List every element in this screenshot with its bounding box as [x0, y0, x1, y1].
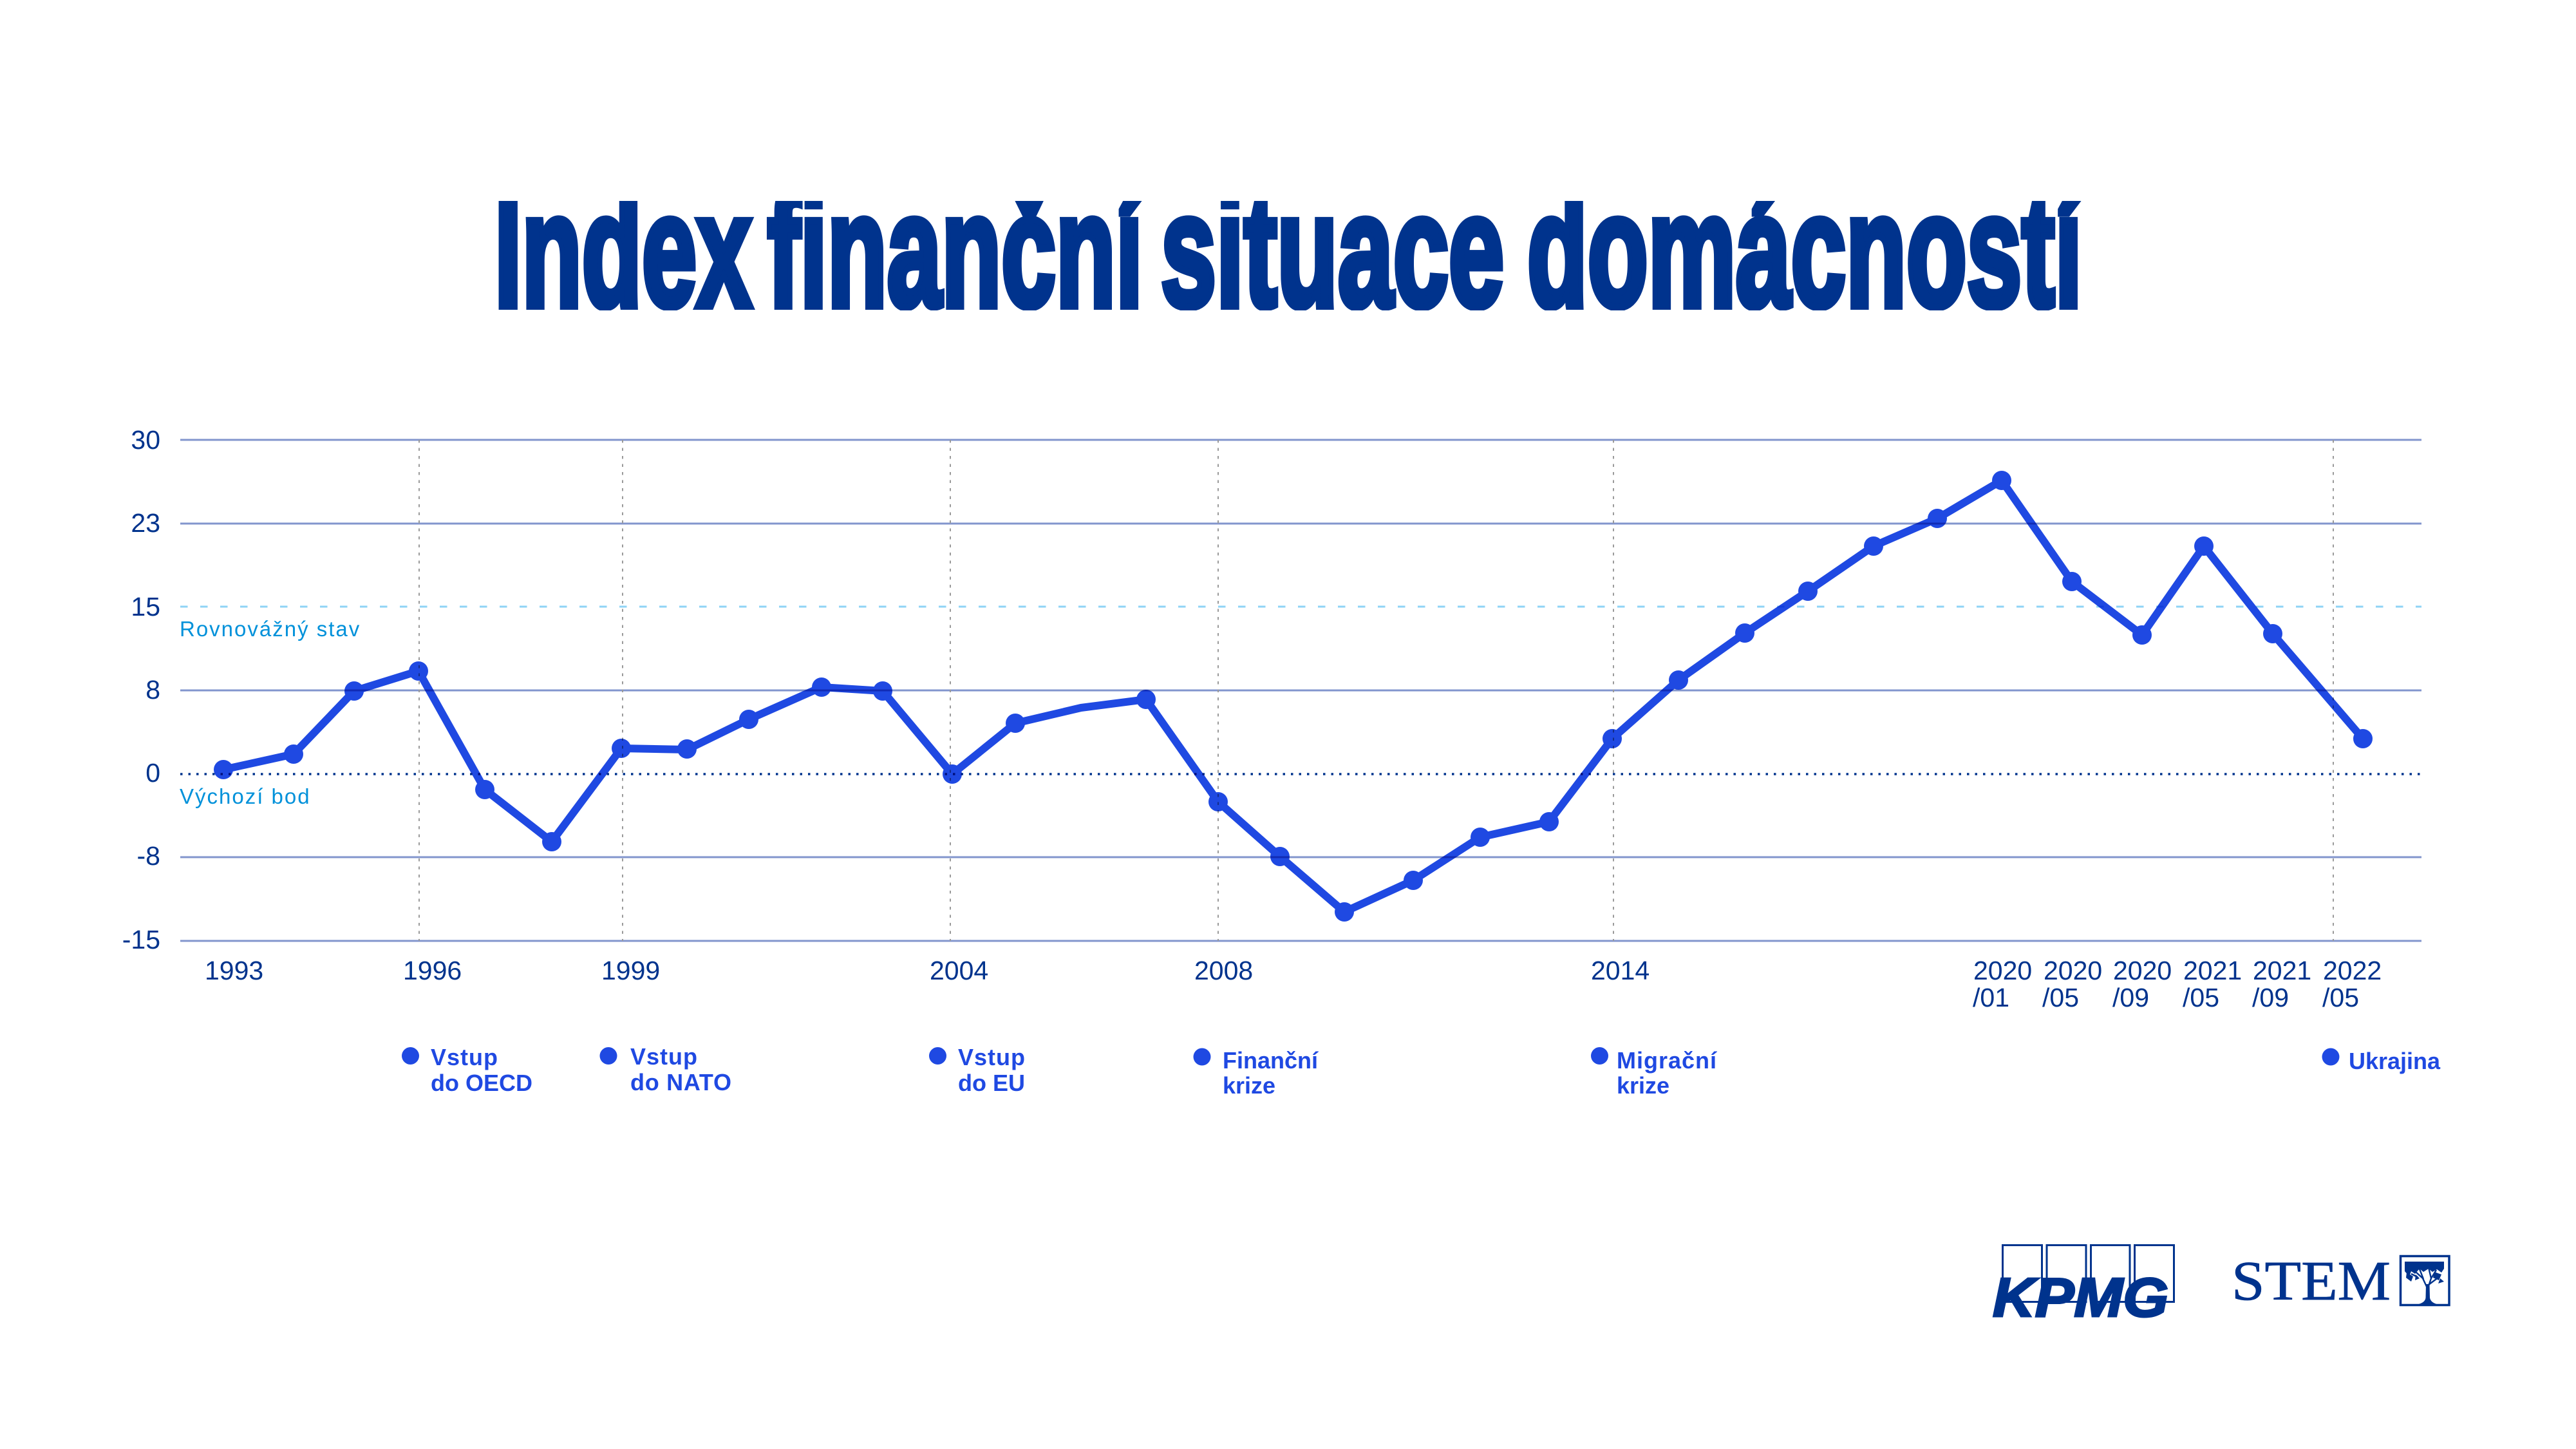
y axis labels: -15 — [122, 925, 160, 954]
title: finanční — [767, 160, 1146, 340]
x axis labels: 2008 — [1194, 956, 1253, 985]
equilibrium dashed line — [180, 605, 2421, 608]
logo: KPMG — [1993, 1245, 2174, 1329]
line chart — [122, 425, 2421, 1012]
title: situace — [1161, 160, 1504, 340]
y axis labels: 0 — [146, 758, 160, 788]
x axis labels: 2004 — [930, 956, 988, 985]
event: Finanční krize: Finanční — [1223, 1047, 1319, 1074]
x axis labels: 2022 — [2323, 956, 2382, 985]
x axis labels — [205, 956, 2382, 1012]
event: Ukrajina: Ukrajina — [2349, 1048, 2441, 1074]
title: Index — [494, 160, 751, 340]
x axis labels: 2021 — [2253, 956, 2311, 985]
event: Vstup do OECD: do OECD — [431, 1070, 532, 1096]
baseline label: Výchozí bod — [180, 784, 311, 808]
x axis labels: /01 — [1973, 983, 2009, 1012]
event: Vstup do EU — [929, 1044, 1025, 1096]
y axis labels: 15 — [131, 592, 160, 621]
title — [498, 201, 2081, 310]
x axis labels: 1999 — [601, 956, 660, 985]
x axis labels: 2020 — [2044, 956, 2102, 985]
logo: STEM — [2232, 1249, 2449, 1312]
x axis labels: 2014 — [1591, 956, 1650, 985]
x axis labels: /05 — [2042, 983, 2079, 1012]
y axis labels: -8 — [137, 841, 160, 871]
horizontal gridlines — [180, 440, 2421, 941]
event: Vstup do NATO: do NATO — [630, 1069, 731, 1095]
event: Migrační krize: krize — [1617, 1072, 1669, 1099]
x axis labels: 2021 — [2183, 956, 2242, 985]
logo: STEM: STEM — [2232, 1249, 2391, 1312]
baseline dotted line — [180, 773, 2421, 775]
icon: tree — [2400, 1256, 2449, 1305]
event: Vstup do EU: do EU — [958, 1070, 1025, 1096]
vertical event lines — [419, 440, 2333, 941]
y axis labels: 23 — [131, 508, 160, 538]
x axis labels: 2020 — [1973, 956, 2032, 985]
data line — [214, 471, 2373, 922]
logo: KPMG: KPMG — [1993, 1267, 2168, 1329]
event: Vstup do EU: Vstup — [958, 1044, 1025, 1070]
title: domácností — [1527, 160, 2085, 340]
event: Vstup do NATO: Vstup — [630, 1043, 697, 1070]
x axis labels: /09 — [2252, 983, 2289, 1012]
x axis labels: /05 — [2183, 983, 2219, 1012]
event: Vstup do NATO — [600, 1043, 731, 1095]
event: Migrační krize: Migrační — [1617, 1047, 1717, 1074]
x axis labels: 1993 — [205, 956, 263, 985]
equilibrium label: Rovnovážný stav — [180, 617, 361, 641]
event: Vstup do OECD — [402, 1044, 532, 1096]
event: Vstup do OECD: Vstup — [431, 1044, 498, 1070]
event: Finanční krize: krize — [1223, 1072, 1275, 1099]
event: Migrační krize — [1591, 1047, 1717, 1099]
y axis labels: 8 — [146, 675, 160, 705]
x axis labels: 2020 — [2113, 956, 2172, 985]
y axis labels: 30 — [131, 425, 160, 455]
x axis labels: 1996 — [403, 956, 462, 985]
x axis labels: /05 — [2322, 983, 2359, 1012]
x axis labels: /09 — [2112, 983, 2149, 1012]
y axis labels — [122, 425, 160, 954]
event: Finanční krize — [1194, 1047, 1319, 1099]
